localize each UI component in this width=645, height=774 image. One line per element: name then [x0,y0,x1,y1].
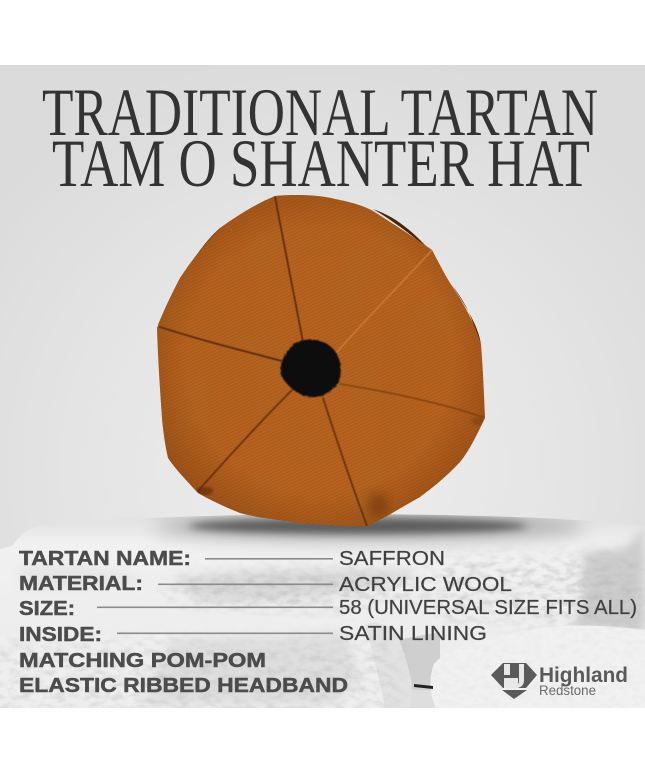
rock platform [0,514,645,710]
logo subtitle: Redstone [539,682,596,698]
logo icon [491,663,537,699]
spec row: size [19,597,637,620]
seam shading [197,417,484,517]
spec row: material [19,573,512,596]
spec row: material: MATERIAL: [19,573,143,595]
logo [491,663,628,699]
hat shadow [155,513,585,541]
spec row: material: ACRYLIC WOOL [339,574,512,596]
spec row: size: 58 (UNIVERSAL SIZE FITS ALL) [339,597,637,619]
spec row: size: SIZE: [19,598,75,620]
hat rim edge [158,209,481,344]
logo wordmark: Highland [539,664,628,687]
feature: matching pom-pom: MATCHING POM-POM [19,650,266,672]
black gap mark [414,684,433,689]
hat body [157,195,485,526]
right front rock [430,626,645,708]
hat [157,195,485,526]
specification list [19,548,637,697]
fabric weave [157,195,485,526]
feature: elastic ribbed headband: ELASTIC RIBBED HEADBAND [19,675,348,697]
spec row: inside: SATIN LINING [339,623,487,645]
panel seams [160,197,483,526]
edge shading [157,195,485,526]
rock gap [400,632,440,690]
spec row: tartan name: TARTAN NAME: [19,548,191,570]
spec row: tartan name [19,548,445,570]
pom-pom [281,340,341,397]
fabric mottling [166,306,167,307]
spec row: inside [19,623,487,646]
spec row: tartan name: SAFFRON [339,548,445,570]
left front rock [0,610,412,708]
title [42,74,598,201]
spec row: inside: INSIDE: [19,624,102,646]
